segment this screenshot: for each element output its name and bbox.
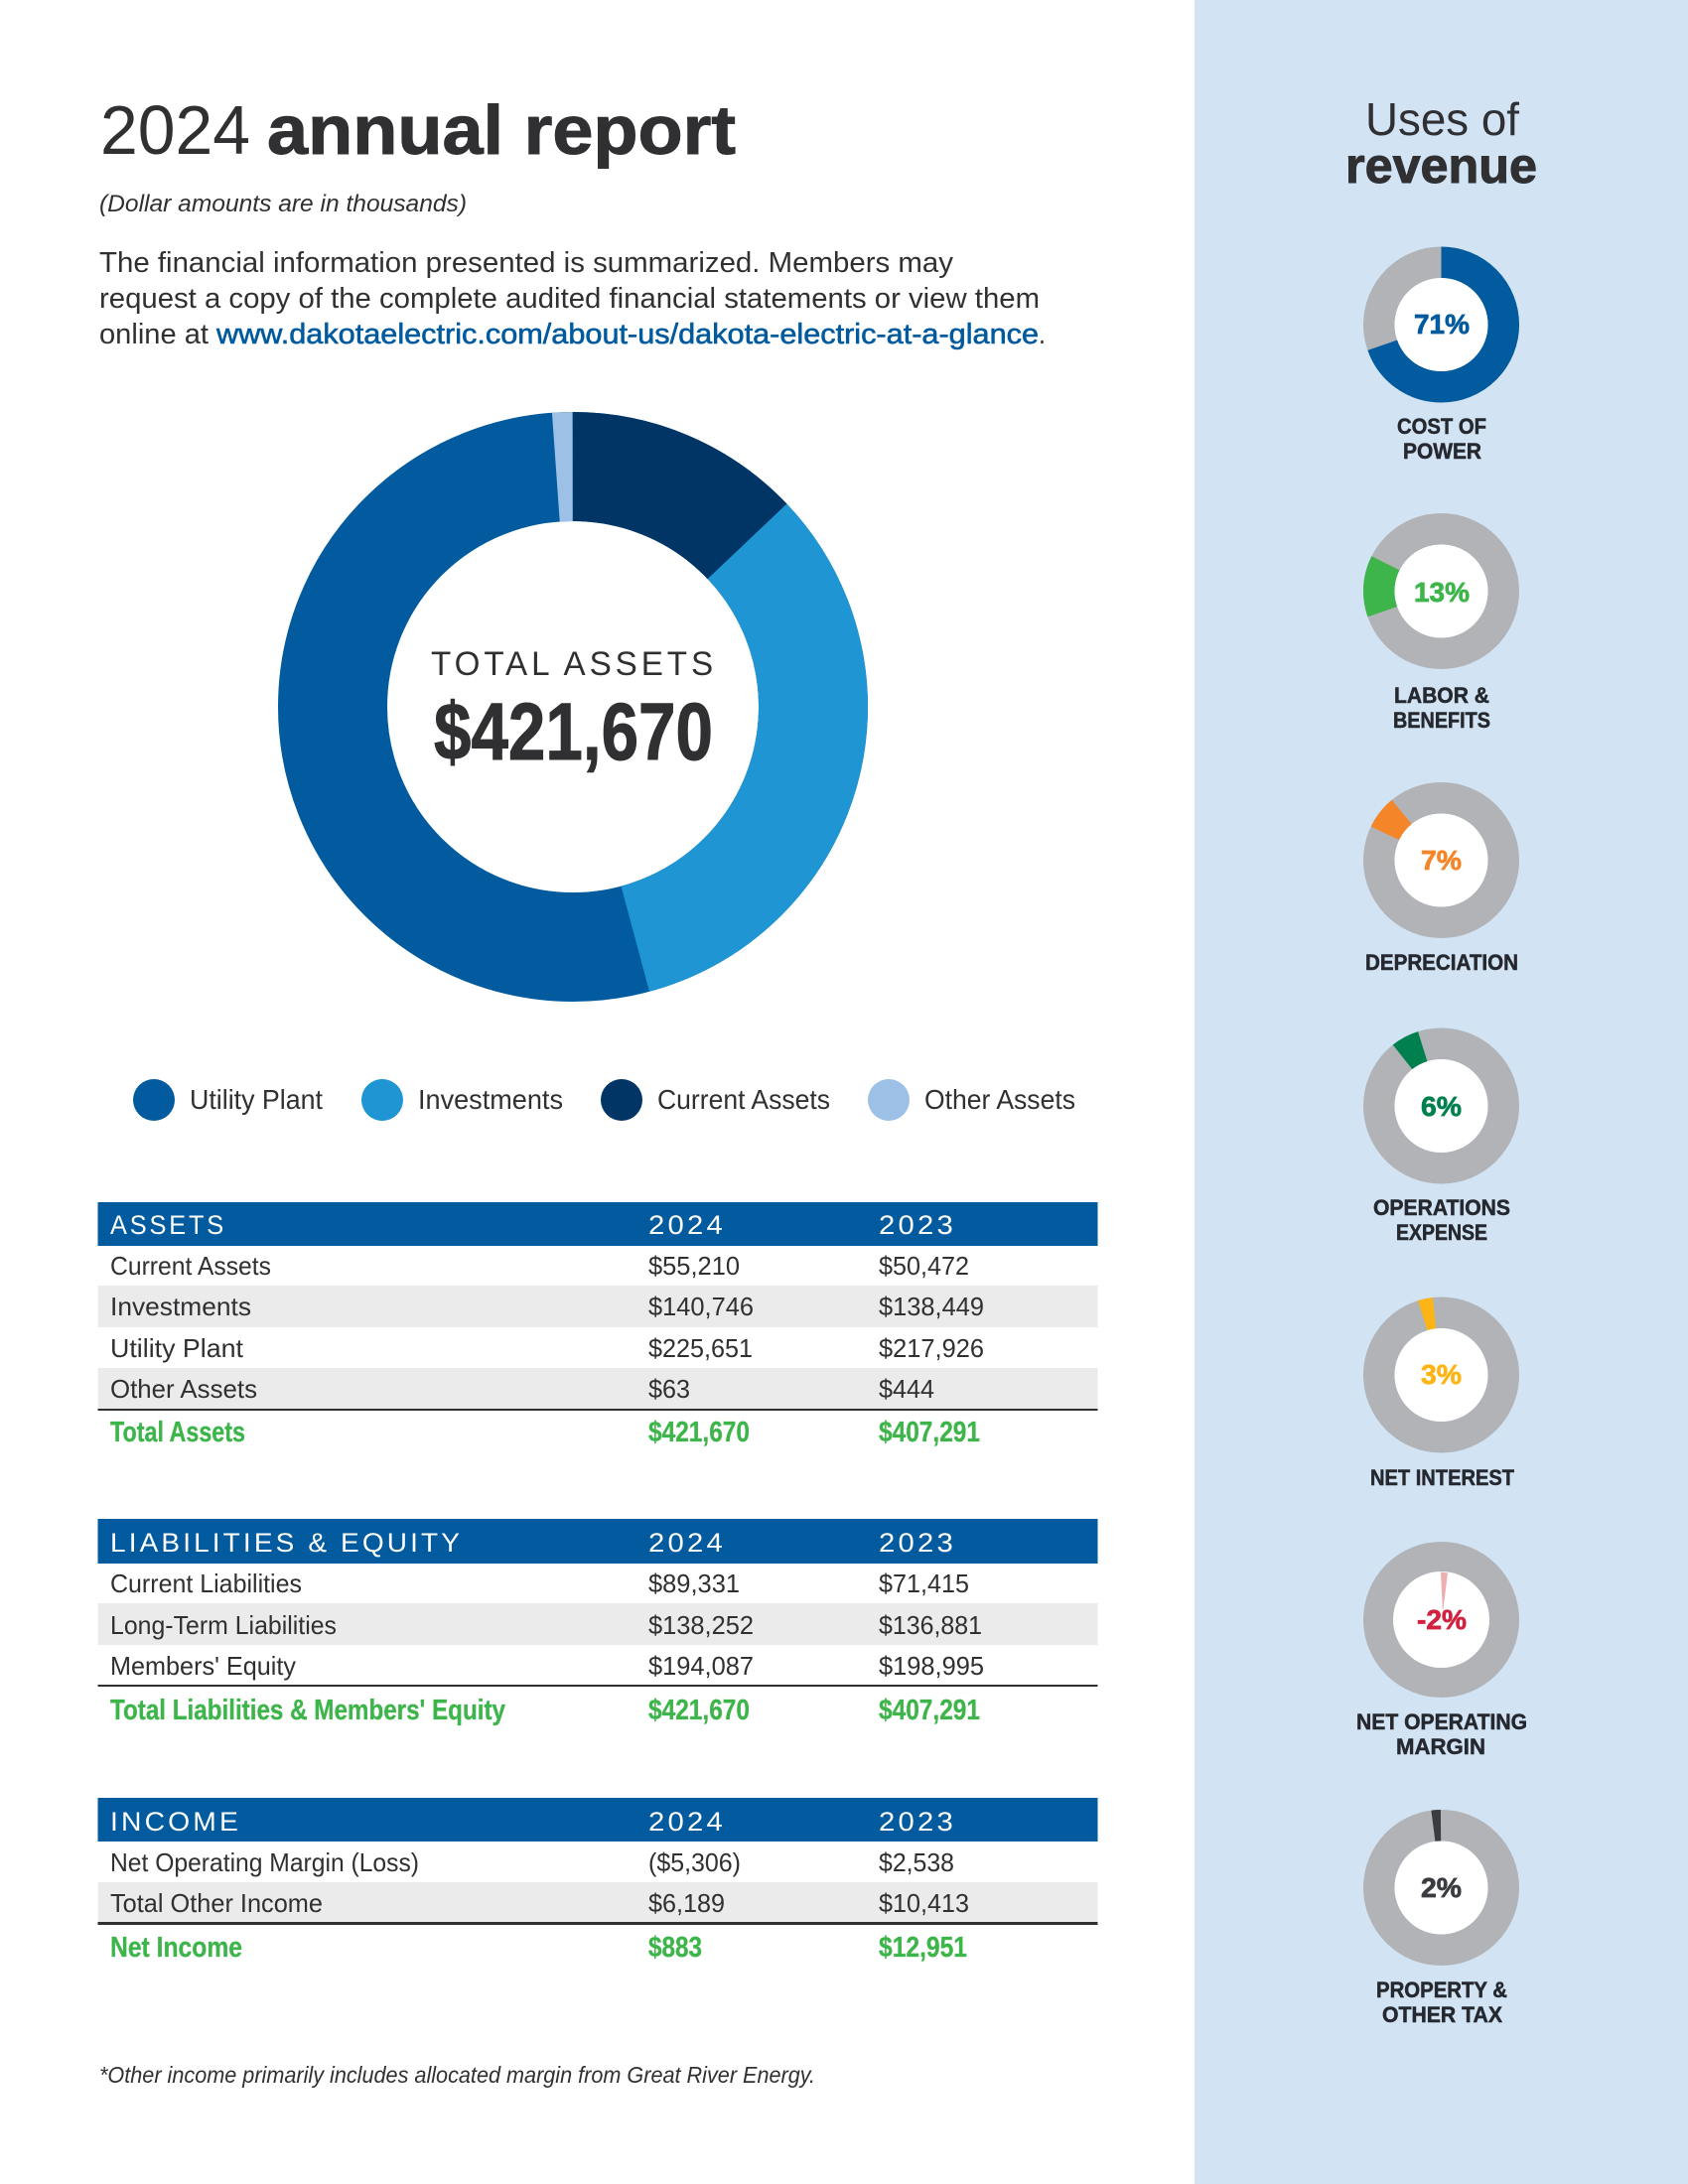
table: liabilities and equity: Current Liabilities xyxy=(110,1569,302,1598)
donut: labor and benefits 13%: BENEFITS xyxy=(1393,708,1490,733)
table: liabilities and equity: $198,995 xyxy=(879,1651,984,1681)
table: assets: $55,210 xyxy=(648,1251,740,1281)
table: assets: Total Assets xyxy=(110,1417,245,1448)
donut: cost of power 71% xyxy=(1379,262,1503,464)
table: liabilities and equity: 2024 xyxy=(648,1528,726,1558)
subtitle note: (Dollar amounts are in thousands) xyxy=(99,191,467,217)
total assets donut chart: $421,670 xyxy=(434,687,713,777)
table: liabilities and equity: Members' Equity xyxy=(110,1651,296,1681)
table: income: ($5,306) xyxy=(648,1847,741,1877)
total assets donut chart xyxy=(333,467,813,947)
sidebar heading: Uses of xyxy=(1365,93,1519,145)
table: liabilities and equity xyxy=(97,1519,1098,1726)
table: liabilities and equity: Total Liabilities & Members' Equity xyxy=(110,1695,505,1726)
donut: net operating margin -2%: -2% xyxy=(1417,1604,1467,1635)
table: liabilities and equity: Long-Term Liabilities xyxy=(110,1610,337,1640)
donut: depreciation 7%: DEPRECIATION xyxy=(1365,950,1518,975)
intro paragraph: www.dakotaelectric.com/about-us/dakota-electric-at-a-glance xyxy=(215,319,1039,350)
legend: Current Assets xyxy=(657,1084,830,1115)
table: income: $12,951 xyxy=(879,1932,967,1964)
table: income: Net Operating Margin (Loss) xyxy=(110,1847,419,1877)
donut: cost of power 71%: POWER xyxy=(1403,439,1481,464)
table: liabilities and equity: $421,670 xyxy=(648,1695,750,1726)
legend: Investments xyxy=(418,1084,563,1115)
donut: net operating margin -2% xyxy=(1356,1558,1527,1759)
table: liabilities and equity: $138,252 xyxy=(648,1610,754,1640)
intro paragraph: request a copy of the complete audited financial statements or view them xyxy=(99,283,1040,315)
table: assets: Other Assets xyxy=(110,1374,257,1404)
donut: labor and benefits 13%: LABOR & xyxy=(1394,683,1489,708)
table: income: 2023 xyxy=(879,1807,956,1837)
donut: net interest 3%: 3% xyxy=(1421,1359,1462,1390)
sidebar heading: revenue xyxy=(1345,138,1537,194)
intro paragraph xyxy=(99,247,1046,350)
donut: cost of power 71%: 71% xyxy=(1414,309,1470,340)
table: income: $6,189 xyxy=(648,1888,725,1918)
intro paragraph: . xyxy=(1039,319,1046,350)
donut: property and other tax 2% xyxy=(1376,1826,1507,2027)
title: annual report xyxy=(267,91,736,169)
table: assets: $140,746 xyxy=(648,1292,754,1321)
table: liabilities and equity: $194,087 xyxy=(648,1651,754,1681)
donut: depreciation 7% xyxy=(1365,798,1518,975)
table: income: $10,413 xyxy=(879,1888,969,1918)
table: assets: $407,291 xyxy=(879,1417,980,1448)
table: liabilities and equity: $89,331 xyxy=(648,1569,740,1598)
table: assets xyxy=(97,1202,1098,1448)
donut: operations expense 6%: EXPENSE xyxy=(1396,1220,1487,1245)
donut: labor and benefits 13%: 13% xyxy=(1414,577,1470,608)
table: assets: Current Assets xyxy=(110,1251,271,1281)
table: liabilities and equity: $71,415 xyxy=(879,1569,969,1598)
title: 2024 xyxy=(100,91,250,169)
title xyxy=(100,91,736,169)
donut: property and other tax 2%: OTHER TAX xyxy=(1382,2002,1502,2027)
donut: net operating margin -2%: MARGIN xyxy=(1396,1734,1485,1759)
table: liabilities and equity: $407,291 xyxy=(879,1695,980,1726)
table: income: Total Other Income xyxy=(110,1888,323,1918)
table: assets: $50,472 xyxy=(879,1251,969,1281)
table: income: Net Income xyxy=(110,1932,242,1964)
donut: operations expense 6% xyxy=(1373,1043,1510,1245)
sidebar heading xyxy=(1345,93,1537,194)
table: assets: $421,670 xyxy=(648,1417,750,1448)
donut: net interest 3%: NET INTEREST xyxy=(1370,1465,1515,1490)
donut: property and other tax 2%: PROPERTY & xyxy=(1376,1978,1507,2002)
panel: uses of revenue xyxy=(1195,0,1688,2184)
donut: operations expense 6%: 6% xyxy=(1421,1091,1462,1122)
table: income: 2024 xyxy=(648,1807,726,1837)
intro paragraph: online at xyxy=(99,319,209,350)
table: liabilities and equity: 2023 xyxy=(879,1528,956,1558)
table: assets: $138,449 xyxy=(879,1292,984,1321)
legend: Utility Plant xyxy=(190,1084,323,1115)
donut: net operating margin -2%: NET OPERATING xyxy=(1356,1709,1527,1734)
table: income: $883 xyxy=(648,1932,702,1964)
table: assets: ASSETS xyxy=(110,1210,226,1240)
table: liabilities and equity: $136,881 xyxy=(879,1610,982,1640)
table: income: INCOME xyxy=(110,1807,241,1837)
table: assets: $444 xyxy=(879,1374,934,1404)
table: income xyxy=(97,1798,1098,1964)
table: assets: $217,926 xyxy=(879,1333,984,1363)
donut: labor and benefits 13% xyxy=(1379,529,1503,733)
donut: net interest 3% xyxy=(1370,1312,1515,1490)
intro paragraph: The financial information presented is summarized. Members may xyxy=(99,247,953,279)
table: assets: $63 xyxy=(648,1374,690,1404)
table: assets: Utility Plant xyxy=(110,1333,244,1363)
table: assets: $225,651 xyxy=(648,1333,753,1363)
table: liabilities and equity: LIABILITIES & EQUITY xyxy=(110,1528,463,1558)
donut: cost of power 71%: COST OF xyxy=(1397,414,1486,439)
table: assets: 2024 xyxy=(648,1210,726,1240)
donut: property and other tax 2%: 2% xyxy=(1421,1872,1462,1903)
legend: Other Assets xyxy=(924,1084,1075,1115)
table: income: $2,538 xyxy=(879,1847,954,1877)
table: assets: Investments xyxy=(110,1292,251,1321)
donut: depreciation 7%: 7% xyxy=(1421,845,1462,876)
table: assets: 2023 xyxy=(879,1210,956,1240)
total assets donut chart: TOTAL ASSETS xyxy=(431,645,717,683)
footnote: *Other income primarily includes allocated margin from Great River Energy. xyxy=(99,2062,815,2088)
legend xyxy=(133,1079,1075,1121)
donut: operations expense 6%: OPERATIONS xyxy=(1373,1195,1510,1220)
